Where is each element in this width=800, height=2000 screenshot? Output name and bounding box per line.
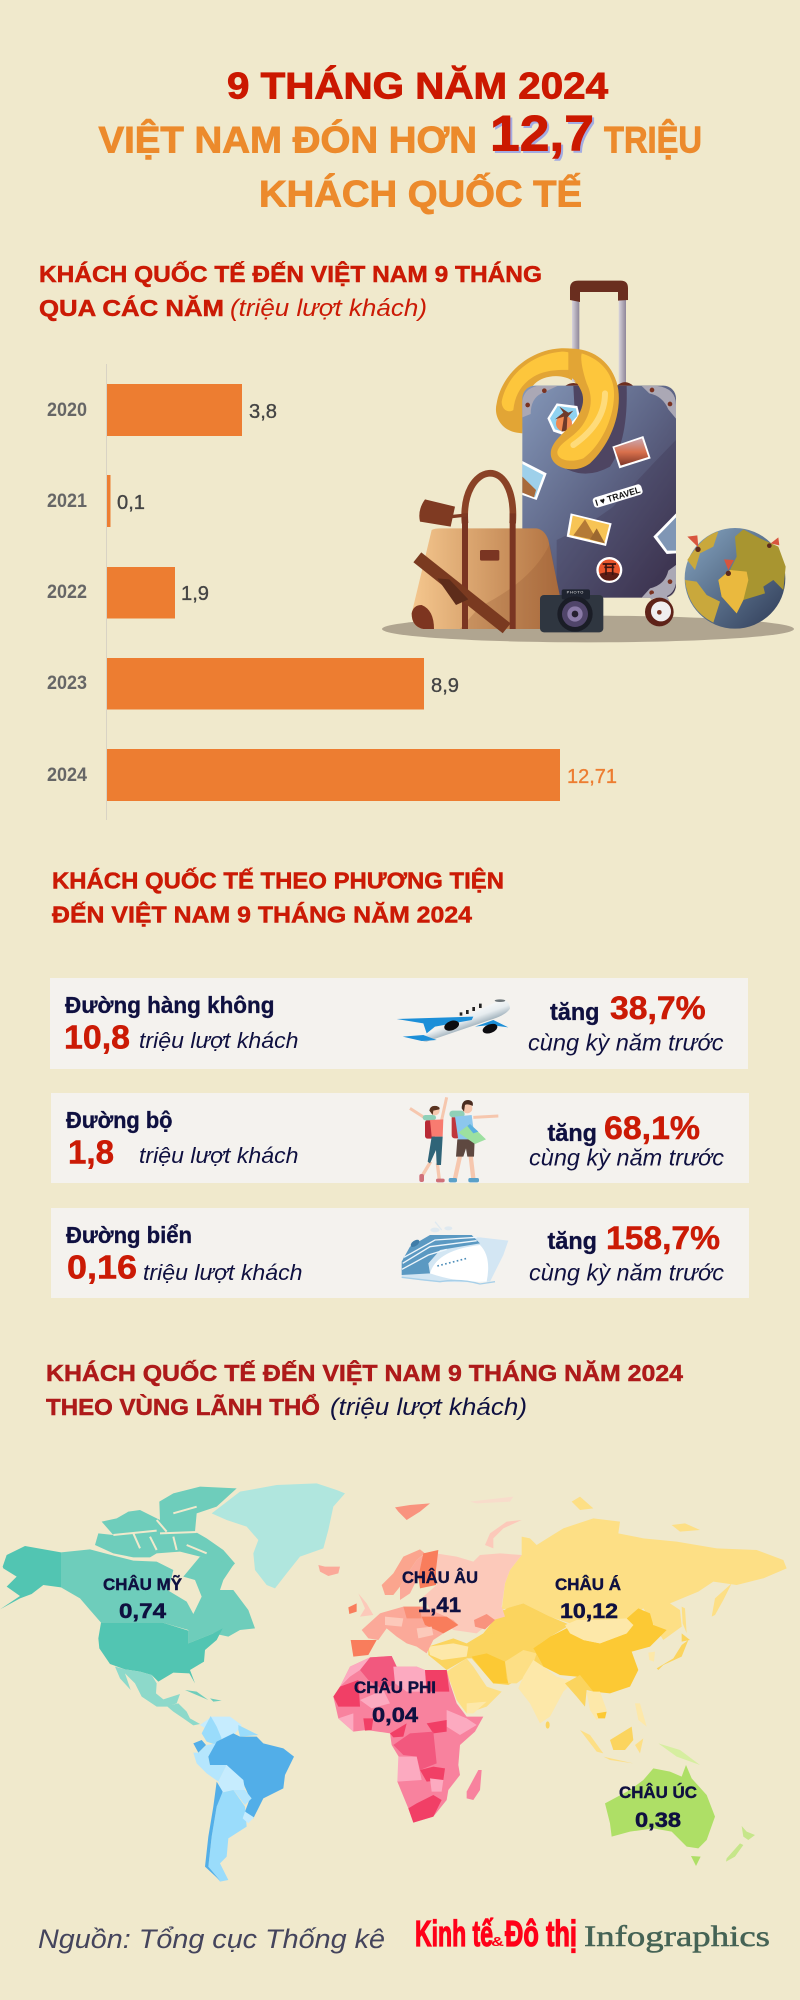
bar 2020: 2020 — [47, 400, 87, 421]
map region: Europe — [318, 1497, 522, 1657]
bar 2024 — [47, 749, 617, 801]
road growth: 68,1% — [604, 1110, 700, 1146]
icon: globe — [685, 528, 786, 629]
map label: Asia: 10,12 — [560, 1600, 618, 1623]
road growth: tăng — [548, 1120, 597, 1147]
title: 12,7 — [490, 106, 594, 162]
heading: arrivals by transport: KHÁCH QUỐC TẾ THEO PHƯƠNG TIỆN — [52, 867, 504, 894]
title: VIỆT NAM ĐÓN HƠN — [98, 118, 477, 160]
title: TRIỆU — [604, 118, 702, 160]
icon: cruise ship — [402, 1222, 508, 1284]
heading: arrivals by transport: ĐẾN VIỆT NAM 9 THÁNG NĂM 2024 — [52, 901, 472, 928]
panel: road — [51, 1093, 749, 1183]
map label: Oceania — [619, 1783, 697, 1832]
map label: Americas: 0,74 — [119, 1600, 166, 1623]
source note: Nguồn: Tổng cục Thống kê — [38, 1924, 385, 1954]
logo: Đô thị — [505, 1913, 577, 1954]
sea growth: cùng kỳ năm trước — [529, 1260, 724, 1286]
map label: Oceania: CHÂU ÚC — [619, 1783, 697, 1802]
bar 2022: 2022 — [47, 582, 87, 603]
map label: Asia: CHÂU Á — [555, 1575, 621, 1594]
bar 2022 — [47, 567, 209, 618]
bar 2024: 12,71 — [567, 765, 617, 788]
heading: arrivals by year: KHÁCH QUỐC TẾ ĐẾN VIỆT NAM 9 THÁNG — [39, 260, 542, 287]
heading: arrivals by region — [46, 1359, 683, 1421]
heading: arrivals by transport — [52, 867, 504, 928]
road growth — [529, 1110, 724, 1171]
sea growth — [529, 1220, 724, 1286]
panel: air — [50, 978, 748, 1069]
map label: Africa: 0,04 — [372, 1704, 418, 1727]
heading: arrivals by region: (triệu lượt khách) — [330, 1394, 527, 1421]
air label: Đường hàng không — [65, 992, 274, 1018]
icon: suitcase and neck pillow: I ♥ TRAVEL — [594, 485, 642, 508]
title: 9 THÁNG NĂM 2024 — [227, 66, 608, 106]
air growth — [528, 990, 724, 1056]
title — [98, 66, 702, 215]
map region: Oceania — [605, 1743, 755, 1866]
map label: Africa — [354, 1678, 436, 1727]
bar 2023 — [47, 658, 459, 710]
icon: camera: PHOTO — [567, 590, 583, 595]
bar 2022: 1,9 — [181, 582, 209, 605]
logo: Infographics — [584, 1920, 770, 1953]
bar 2020: 3,8 — [249, 400, 277, 423]
map label: Americas — [103, 1574, 182, 1623]
map region: Africa — [333, 1656, 483, 1823]
bar 2024: 2024 — [47, 765, 87, 786]
title: KHÁCH QUỐC TẾ — [259, 173, 582, 215]
logo: & — [491, 1934, 504, 1949]
bar 2021: 0,1 — [117, 491, 145, 514]
road value: 1,8 — [68, 1134, 114, 1171]
bar 2021 — [47, 475, 145, 527]
map label: Europe: 1,41 — [418, 1594, 461, 1617]
title: 12,7 — [492, 108, 596, 164]
sea label: Đường biển — [66, 1222, 192, 1248]
sea growth: tăng — [548, 1228, 597, 1255]
panel: sea — [51, 1208, 749, 1298]
air value: 10,8 — [64, 1019, 130, 1056]
road unit: triệu lượt khách — [139, 1143, 298, 1168]
heading: arrivals by year: QUA CÁC NĂM — [39, 294, 224, 321]
air growth: tăng — [550, 999, 600, 1026]
icon: leather bag — [412, 473, 562, 629]
sea value: 0,16 — [67, 1249, 137, 1286]
icon: two travellers — [410, 1097, 498, 1182]
map label: Oceania: 0,38 — [635, 1809, 681, 1832]
map region: Americas — [0, 1483, 345, 1882]
logo: Kinh tế — [415, 1913, 494, 1954]
map label: Africa: CHÂU PHI — [354, 1678, 436, 1697]
map label: Americas: CHÂU MỸ — [103, 1574, 182, 1594]
road growth: cùng kỳ năm trước — [529, 1145, 724, 1171]
map label: Asia — [555, 1575, 621, 1623]
air growth: 38,7% — [610, 990, 706, 1026]
bar 2021: 2021 — [47, 491, 87, 512]
air unit: triệu lượt khách — [139, 1028, 298, 1053]
bar 2023: 2023 — [47, 673, 87, 694]
logo — [415, 1913, 770, 1954]
bar 2023: 8,9 — [431, 674, 459, 697]
road label: Đường bộ — [66, 1107, 172, 1133]
bar 2020 — [47, 384, 277, 436]
icon: camera — [540, 589, 603, 632]
heading: arrivals by year: (triệu lượt khách) — [230, 295, 427, 322]
heading: arrivals by region: THEO VÙNG LÃNH THỔ — [46, 1393, 320, 1420]
sea growth: 158,7% — [606, 1220, 720, 1256]
illustration: luggage, camera and globe — [382, 281, 794, 642]
air growth: cùng kỳ năm trước — [528, 1030, 724, 1056]
icon: suitcase and neck pillow — [496, 281, 676, 626]
heading: arrivals by year — [39, 260, 542, 322]
sea unit: triệu lượt khách — [143, 1260, 302, 1285]
map label: Europe: CHÂU ÂU — [402, 1568, 478, 1587]
map region: Asia — [428, 1497, 787, 1763]
map label: Europe — [402, 1568, 478, 1617]
heading: arrivals by region: KHÁCH QUỐC TẾ ĐẾN VIỆT NAM 9 THÁNG NĂM 2024 — [46, 1359, 683, 1386]
world map — [0, 1483, 787, 1882]
bar chart: arrivals 2020-2024 — [47, 364, 617, 820]
icon: airplane — [397, 999, 510, 1042]
